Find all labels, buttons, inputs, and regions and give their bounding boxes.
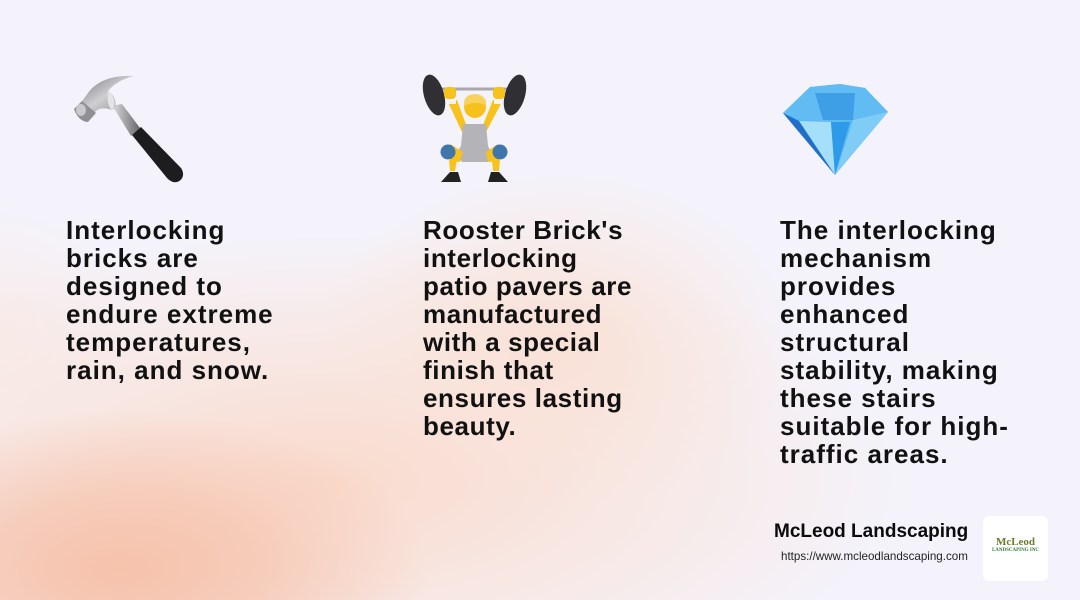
text block: column 1: bricks are <box>66 243 199 273</box>
left weight <box>419 72 449 118</box>
text block: column 3: suitable for high- <box>780 411 1009 441</box>
text block: column 3: mechanism <box>780 243 932 273</box>
right weight <box>500 72 530 118</box>
logo card <box>983 516 1048 581</box>
text block: column 3: enhanced <box>780 299 909 329</box>
hair <box>464 94 486 106</box>
bar <box>440 88 510 90</box>
brand name: McLeod Landscaping <box>774 521 968 542</box>
icon: hammer <box>74 76 184 182</box>
text block: column 2 <box>422 215 632 441</box>
icon: gem <box>783 84 888 175</box>
text block: column 3: traffic areas. <box>780 439 949 469</box>
logo text <box>992 536 1039 553</box>
knees <box>440 144 456 160</box>
text block: column 3 <box>780 215 1009 469</box>
text block: column 2: beauty. <box>423 411 516 441</box>
text block: column 3: structural <box>780 327 910 357</box>
text block: column 1: designed to <box>66 271 223 301</box>
logo text: McLeod <box>996 536 1035 548</box>
hands <box>444 87 456 99</box>
text block: column 2: with a special <box>423 327 600 357</box>
text block: column 2: manufactured <box>423 299 602 329</box>
text block: column 2: patio pavers are <box>423 271 632 301</box>
text block: column 2: interlocking <box>423 243 578 273</box>
arms <box>447 100 503 132</box>
text block: column 3: provides <box>780 271 896 301</box>
text block: column 1: temperatures, <box>66 327 251 357</box>
website url: https://www.mcleodlandscaping.com <box>781 550 968 563</box>
shoes <box>441 172 461 182</box>
text block: column 2: finish that <box>423 355 554 385</box>
text block: column 3: The interlocking <box>780 215 997 245</box>
text block: column 2: Rooster Brick's <box>423 215 623 245</box>
legs <box>450 144 499 162</box>
body <box>456 124 492 162</box>
text block: column 1: rain, and snow. <box>66 355 269 385</box>
icon: person lifting weights <box>422 74 526 182</box>
text block: column 3: stability, making <box>780 355 999 385</box>
wrist bands <box>447 99 503 104</box>
text block: column 1: endure extreme <box>66 299 274 329</box>
text block: column 1 <box>66 215 274 385</box>
logo text: LANDSCAPING INC <box>992 548 1039 553</box>
text block: column 1: Interlocking <box>66 215 225 245</box>
head <box>464 96 486 118</box>
text block: column 3: these stairs <box>780 383 937 413</box>
text block: column 2: ensures lasting <box>423 383 623 413</box>
